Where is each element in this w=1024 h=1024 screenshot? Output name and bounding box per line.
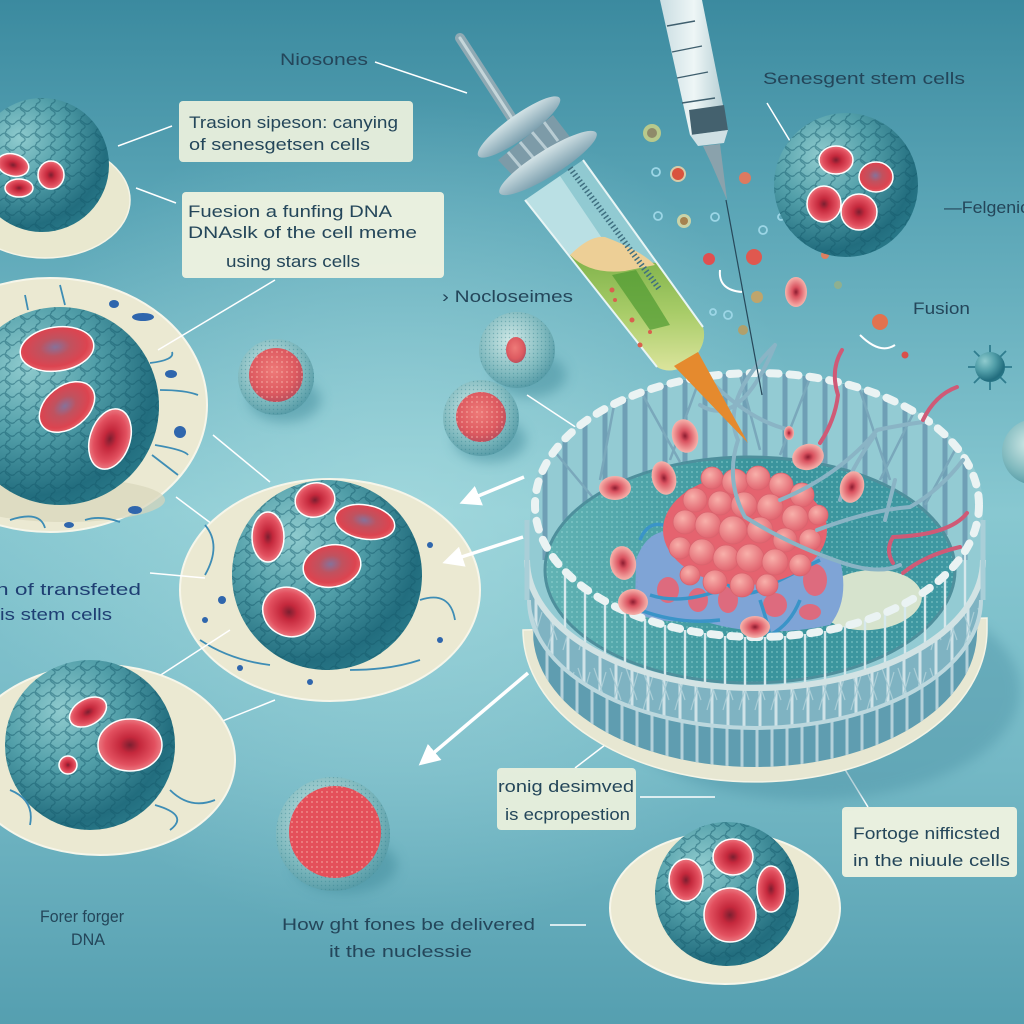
label: senescent stem cells: Senesgent stem cells [763,70,965,88]
cell: right edge partial [1002,419,1024,485]
cell: lower right cell [610,822,840,984]
label: foreign DNA [40,908,124,949]
leader lines: upper left [118,62,790,203]
syringe: vertical needle [660,0,762,395]
label: transfected stem cells: is stem cells [0,606,112,624]
callout: expression label: ronig desimved [498,778,634,796]
label: Niosomes: Niosones [280,51,368,69]
leader lines: lower centre [550,745,868,925]
label: felgenic: —Felgenic [944,199,1024,217]
callout: nucleus label: in the niuule cells [853,852,1010,870]
label: delivery to nucleus [282,916,535,961]
callout: nucleus label: Fortoge nifficsted [853,825,1000,843]
leader line: nucleosome to scaffold [527,395,580,430]
label: Nucleosomes: › Nocloseimes [442,288,573,306]
tissue: red blood cells [599,277,868,638]
callout: expression label: is ecpropestion [505,806,630,824]
syringe: large angled barrel [460,38,748,443]
callout: nucleus label [842,807,1017,877]
icon: small spiky cell [968,345,1012,390]
cell: top left senescent cell [0,98,130,258]
cell: center cell [180,478,480,701]
niosome: speckled red sphere [276,777,397,893]
callout: expression label [497,768,636,830]
particles: floating niosomes [643,124,908,358]
label: foreign DNA: DNA [71,931,105,949]
label: fusion: Fusion [913,300,970,318]
leader lines: centre left [158,280,275,524]
label: foreign DNA: Forer forger [40,908,124,926]
callout: transfection label [179,101,413,162]
arrows: from scaffold to cells [424,477,528,761]
tissue: branching vessels [700,345,967,573]
callout: transfection label: Trasion sipeson: canying [189,114,398,132]
callout: fusion label: DNAslk of the cell meme [188,224,417,242]
label: delivery to nucleus: it the nuclessie [329,943,472,961]
label: delivery to nucleus: How ght fones be delivered [282,916,535,934]
cell: lower left cell [0,660,235,855]
callout: fusion label [182,192,444,278]
leader lines: lower left [130,573,275,742]
tissue: front fence posts and rim [527,373,983,728]
scaffold: cell culture dish [523,373,1020,800]
cell: top right senescent cell [774,113,918,257]
cell: large left cell [0,278,207,532]
tissue: network of blue vessels [635,524,843,640]
tissue: central pink cell cluster [663,466,828,597]
niosome: red sphere left [238,339,321,422]
callout: fusion label: Fuesion a funfing DNA [188,203,392,221]
callout: transfection label: of senesgetsen cells [189,136,370,154]
niosome: lower center sphere [443,380,526,462]
label: transfected stem cells [0,581,141,624]
niosome: upper center sphere [479,312,566,397]
callout: fusion label: using stars cells [226,253,360,271]
